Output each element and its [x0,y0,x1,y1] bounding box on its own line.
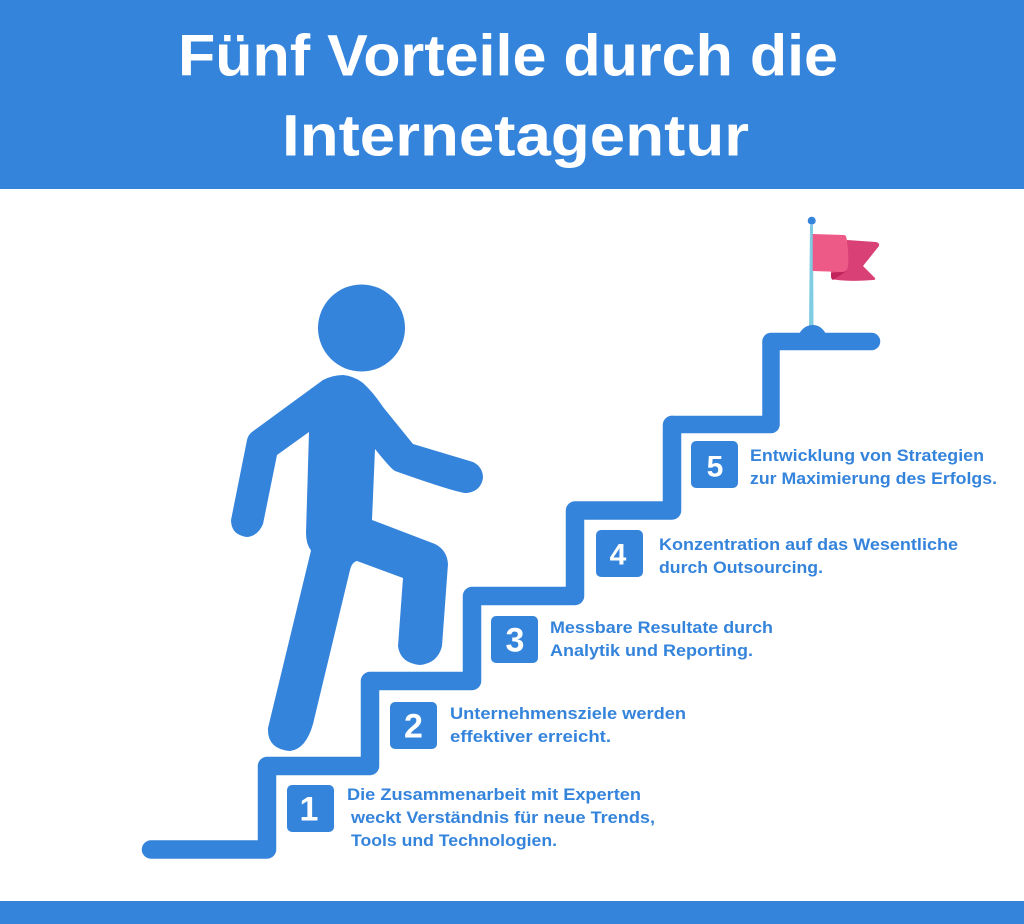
badge 5: 5 [707,450,723,484]
step 2 [390,702,686,749]
badge 2: 2 [404,708,423,746]
text step 4: Konzentration auf das Wesentliche [659,535,958,554]
text step 2: Unternehmensziele werden [450,704,686,723]
text step 1: Tools und Technologien. [351,831,557,850]
badge 1: 1 [300,790,318,828]
badge 2 [390,702,437,749]
title [178,24,838,168]
title: Fünf Vorteile durch die [178,24,838,88]
step 3 [491,616,773,663]
text step 4 [659,535,958,577]
icon: flag at the top of the stairs [799,217,879,334]
badge 3 [491,616,538,663]
text step 3 [550,618,773,660]
staircase [151,342,872,850]
text step 5: zur Maximierung des Erfolgs. [750,469,997,488]
step 5 [691,441,997,488]
text step 3: Analytik und Reporting. [550,641,753,660]
text step 2: effektiver erreicht. [450,727,611,746]
title: Internetagentur [282,104,749,168]
badge 3: 3 [506,622,524,660]
title banner [0,0,1024,189]
badge 4: 4 [610,538,627,572]
text step 1: Die Zusammenarbeit mit Experten [347,785,641,804]
text step 4: durch Outsourcing. [659,558,823,577]
badge 4 [596,530,643,577]
text step 5 [750,446,997,488]
text step 1 [347,785,655,850]
badge 1 [287,785,334,832]
icon: climbing person [231,284,483,751]
step 4 [596,530,958,577]
step 1 [287,785,655,850]
text step 5: Entwicklung von Strategien [750,446,984,465]
text step 2 [450,704,686,746]
footer band [0,901,1024,924]
badge 5 [691,441,738,488]
text step 3: Messbare Resultate durch [550,618,773,637]
text step 1: weckt Verständnis für neue Trends, [350,808,655,827]
